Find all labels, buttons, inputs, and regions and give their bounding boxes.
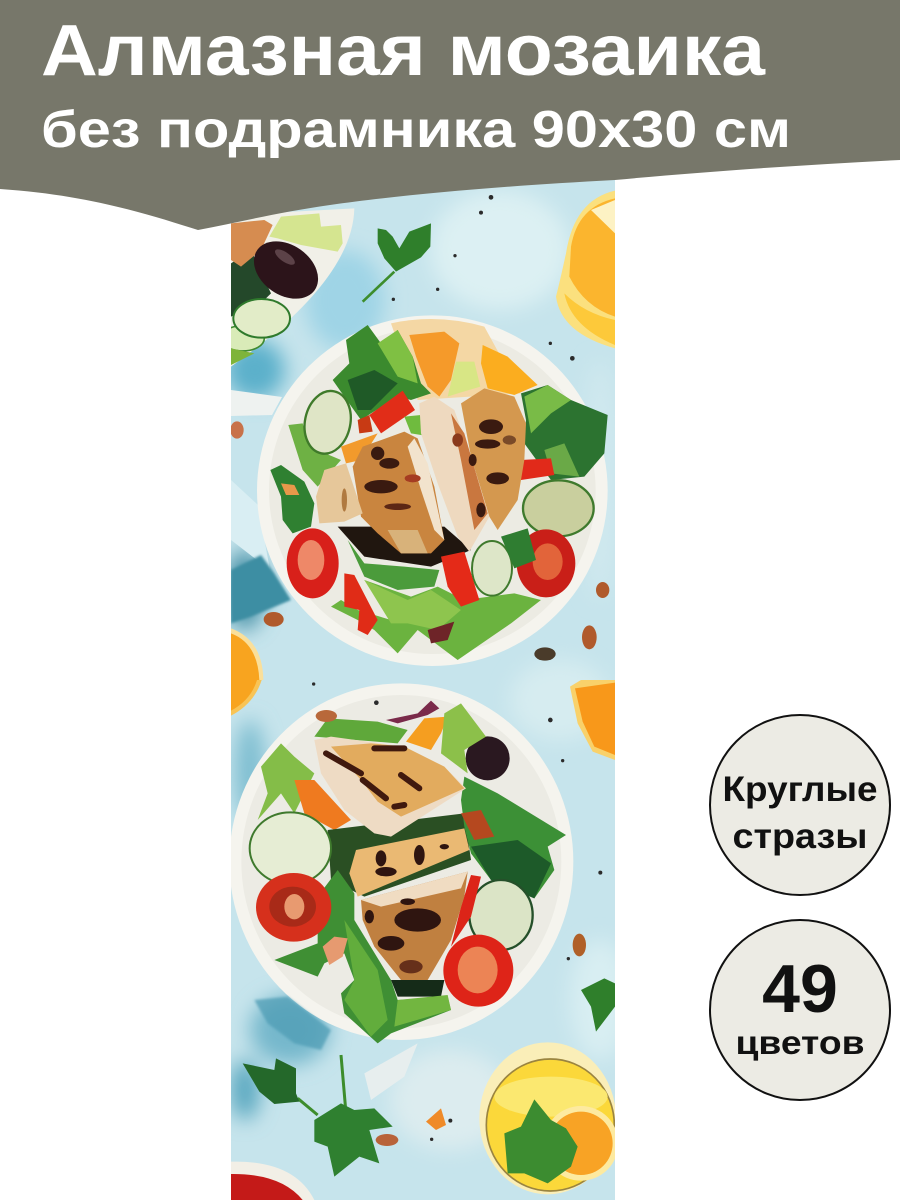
red pepper right (521, 458, 554, 480)
specks (312, 682, 602, 1141)
bowl (231, 1162, 314, 1200)
pale lettuce (269, 213, 343, 252)
chicken left (353, 432, 444, 553)
cucumber bottom (472, 541, 512, 596)
nuts (230, 421, 609, 661)
lettuce top (441, 703, 486, 773)
orange piece (409, 332, 459, 397)
parsley bottom left (243, 1055, 393, 1177)
orange chunk (294, 780, 351, 830)
badge: round rhinestones: стразы (732, 817, 868, 856)
white paint stripes (231, 390, 282, 416)
dark greens (231, 250, 271, 317)
chicken middle (349, 828, 469, 897)
orange crumb (426, 1108, 446, 1130)
orange wedge (481, 345, 538, 395)
big right lettuce (461, 777, 566, 898)
tomato left (287, 528, 339, 598)
char marks right (452, 419, 516, 517)
char marks left (342, 447, 421, 512)
chicken bit (231, 220, 273, 267)
tomato left (256, 873, 331, 942)
pale lettuce (448, 362, 480, 397)
dark center shadow (338, 527, 471, 567)
side plate (231, 208, 354, 367)
plate (257, 315, 608, 666)
title: Алмазная мозаика (41, 11, 766, 91)
blue paint streak (254, 997, 331, 1050)
left lettuce (258, 743, 314, 820)
cucumber right (469, 880, 533, 950)
green lettuce behind (404, 415, 422, 436)
black olive (466, 736, 510, 780)
plate (229, 683, 573, 1040)
green pepper (348, 540, 439, 590)
tomato right (443, 935, 513, 1007)
lettuce back (314, 718, 408, 743)
black olive (254, 241, 318, 299)
orange wedge right (570, 680, 615, 760)
header banner (0, 0, 900, 230)
bottom lettuce (331, 580, 541, 660)
orange slice in glass (544, 1106, 618, 1181)
bottom leaf (274, 870, 451, 1043)
right lettuce (521, 385, 608, 480)
orange slice left (231, 628, 263, 680)
parsley right (581, 978, 615, 1032)
dark leaf near tomato (501, 528, 536, 568)
chicken bottom (361, 872, 468, 980)
cucumber (303, 390, 352, 455)
cucumber slices (231, 326, 266, 352)
photo background (231, 170, 615, 1200)
chicken right (461, 388, 526, 530)
orange slice left (231, 680, 262, 716)
juice glass (479, 1042, 616, 1194)
juice glass (556, 191, 615, 348)
specks (392, 195, 575, 361)
red peppers bottom (441, 552, 479, 607)
tomato right (517, 529, 575, 597)
red bits (461, 810, 494, 840)
peach bit (323, 937, 348, 965)
red microgreen (386, 701, 439, 723)
badge: 49 colours: цветов (736, 1024, 864, 1061)
top area: side plate, parsley and juice (221, 191, 615, 367)
left dark leaf (270, 465, 314, 533)
red pepper (358, 415, 373, 433)
badge: 49 colours: 49 (762, 951, 838, 1027)
badge: round rhinestones (710, 715, 890, 895)
pale paper smear (364, 1043, 418, 1100)
left lettuce (288, 423, 341, 487)
almond (376, 1134, 398, 1146)
lettuce top left (333, 325, 431, 420)
cucumber left (250, 812, 331, 884)
centre greens (328, 813, 471, 897)
subtitle: без подрамника 90х30 см (41, 101, 791, 159)
plate one (230, 315, 609, 680)
chicken top (314, 737, 466, 837)
orange piece (406, 717, 448, 750)
orange chunk (341, 433, 378, 463)
photo: chicken salad plates (221, 170, 630, 1200)
parsley sprig (363, 272, 394, 302)
red strip (451, 875, 481, 947)
cucumber right (523, 480, 594, 536)
plate two (229, 680, 618, 1200)
badge: round rhinestones: Круглые (722, 770, 878, 809)
parsley in glass (504, 1099, 578, 1183)
background paint streak (231, 555, 291, 623)
badge: 49 colours (710, 920, 890, 1100)
